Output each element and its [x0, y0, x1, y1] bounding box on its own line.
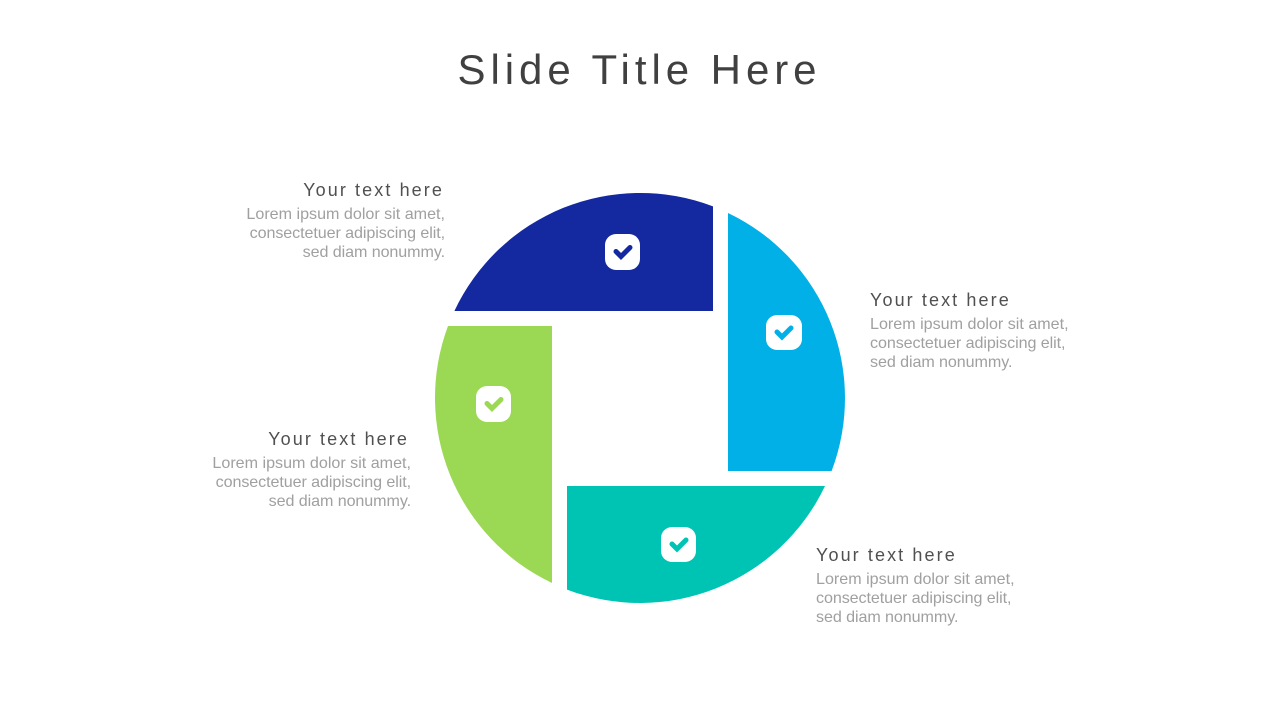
title: Slide Title Here: [458, 46, 822, 93]
text block: left: Your text here: [268, 429, 409, 449]
text block: right: Lorem ipsum dolor sit amet,: [870, 315, 1069, 333]
text block: top left: consectetuer adipiscing elit,: [250, 224, 445, 242]
text block: left: [212, 429, 411, 510]
segment: teal: [567, 486, 825, 603]
text block: bottom right: sed diam nonummy.: [816, 608, 958, 626]
segment: green: [435, 326, 552, 583]
text block: left: consectetuer adipiscing elit,: [216, 473, 411, 491]
text block: left: sed diam nonummy.: [269, 492, 411, 510]
text block: top left: Your text here: [303, 180, 444, 200]
text block: bottom right: Your text here: [816, 545, 957, 565]
segment: cyan: [728, 213, 845, 471]
text block: right: Your text here: [870, 290, 1011, 310]
text block: right: consectetuer adipiscing elit,: [870, 334, 1065, 352]
text block: top left: sed diam nonummy.: [303, 243, 445, 261]
segment: navy: [454, 193, 713, 311]
text block: bottom right: [816, 545, 1015, 626]
text block: right: sed diam nonummy.: [870, 353, 1012, 371]
text block: left: Lorem ipsum dolor sit amet,: [212, 454, 411, 472]
text block: bottom right: consectetuer adipiscing elit,: [816, 589, 1011, 607]
text block: right: [870, 290, 1069, 371]
text block: top left: [246, 180, 445, 261]
text block: top left: Lorem ipsum dolor sit amet,: [246, 205, 445, 223]
text block: bottom right: Lorem ipsum dolor sit amet,: [816, 570, 1015, 588]
